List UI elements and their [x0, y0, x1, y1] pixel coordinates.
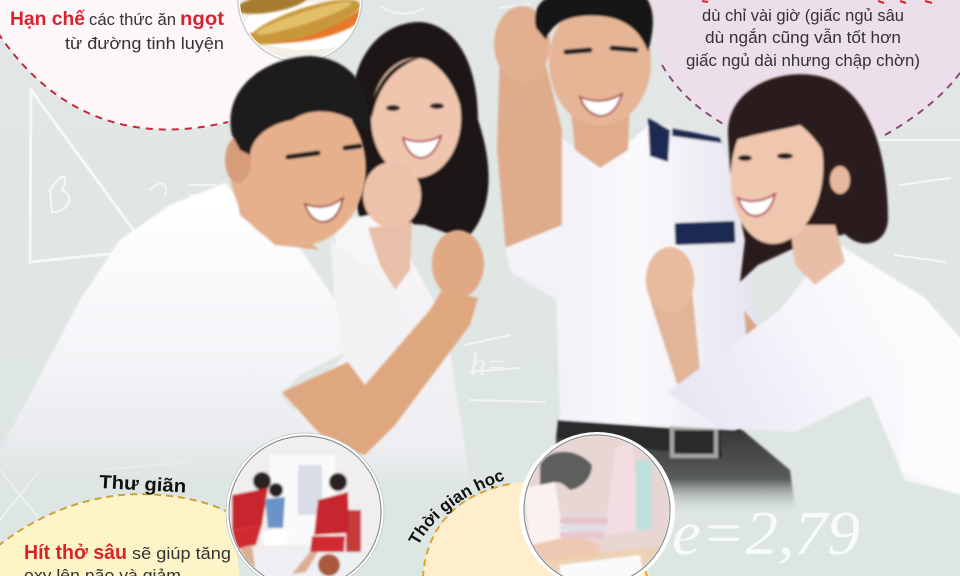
player in blue — [262, 483, 288, 545]
relax heading: Thư giãn — [99, 472, 187, 498]
panel: top-left nutrition bubble — [0, 0, 300, 129]
sleep advice text: giấc ngủ dài nhưng chập chờn) — [686, 52, 920, 70]
sleep advice text: dù ngắn cũng vẫn tốt hơn — [705, 28, 901, 47]
person: boy with raised fist, left — [0, 56, 484, 500]
player in red, left — [232, 472, 271, 575]
panel: top-right sleep bubble — [645, 0, 960, 135]
photo: fried fish plate — [237, 0, 363, 61]
cropped highlight marks at top edge — [702, 1, 932, 3]
nutrition text line 1: ngọt — [180, 9, 225, 30]
person: girl with short hair, right — [646, 74, 960, 495]
photo: basketball players — [225, 433, 385, 576]
relax body text: sẽ giúp tăng — [132, 544, 231, 563]
person: boy in uniform with raised fist — [494, 0, 796, 515]
player in red, right — [292, 473, 349, 576]
panel: study time bubble — [423, 482, 650, 576]
chalk formula: e=2,79 — [672, 500, 860, 568]
relax body text: Hít thở sâu — [24, 542, 127, 564]
chalk formula: h: h= — [470, 346, 508, 382]
sleep advice text — [686, 7, 920, 70]
nutrition text line 2: từ đường tinh luyện — [65, 35, 224, 53]
uniform epaulettes and badge — [648, 118, 735, 245]
study heading: Thời gian học — [408, 472, 504, 543]
nutrition text line 1: Hạn chế — [10, 9, 85, 30]
person: girl in white ao dai — [265, 22, 489, 480]
panel: relax bubble — [0, 494, 240, 576]
sleep advice text: dù chỉ vài giờ (giấc ngủ sâu — [702, 7, 904, 25]
nutrition text line 1: các thức ăn — [89, 11, 176, 29]
nutrition text line 1 — [10, 9, 225, 30]
relax body text — [24, 542, 231, 564]
photo: student writing at desk — [519, 432, 675, 576]
